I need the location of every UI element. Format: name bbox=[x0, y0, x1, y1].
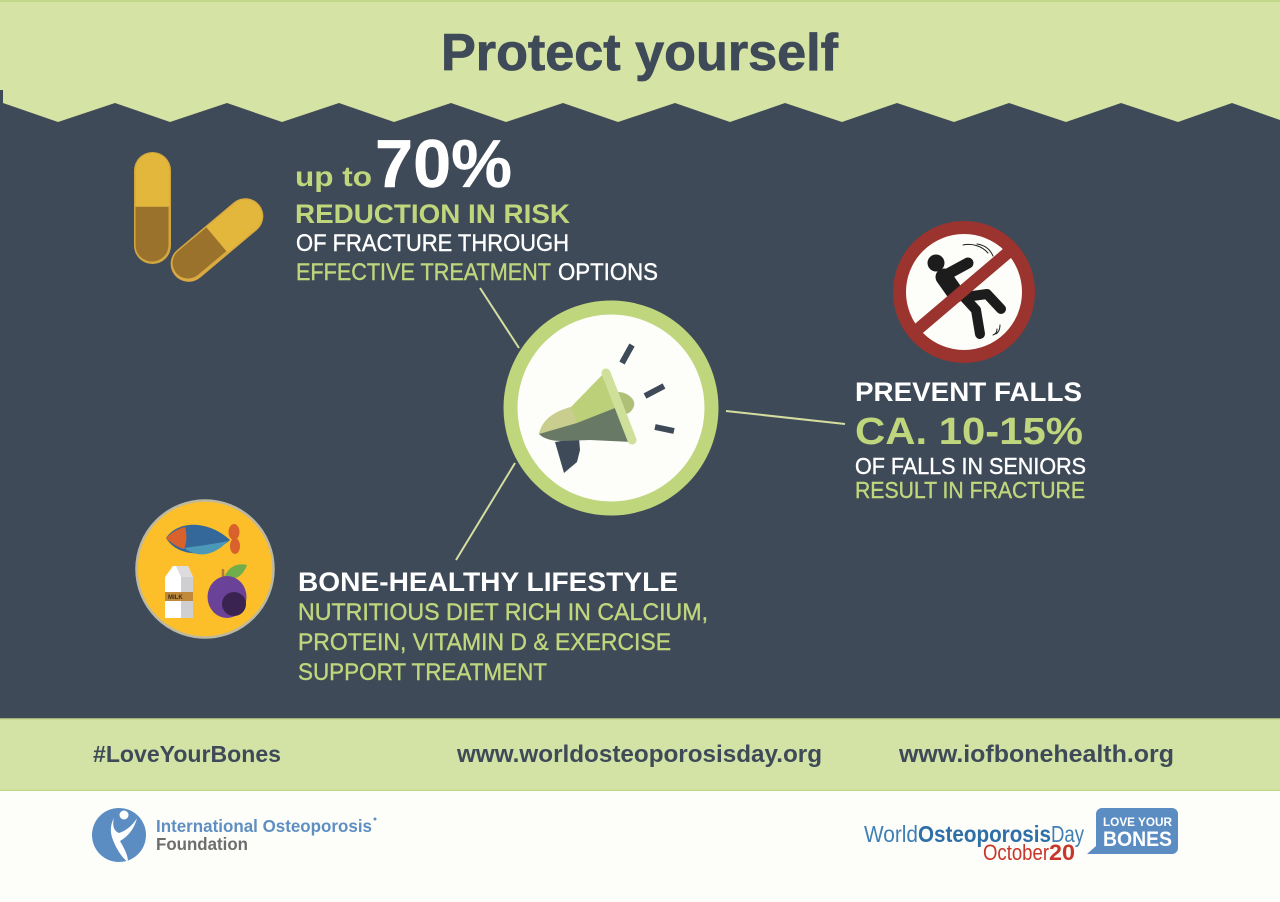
logo: world osteoporosis day bbox=[864, 821, 1084, 865]
logo name line one: International Osteoporosis bbox=[156, 816, 372, 836]
logo emblem bbox=[92, 808, 146, 862]
heading: BONE-HEALTHY LIFESTYLE bbox=[298, 567, 678, 597]
icon: diagonal capsule bbox=[163, 191, 271, 289]
logo name line two: Foundation bbox=[156, 834, 248, 854]
website: iof bone health: www.iofbonehealth.org bbox=[898, 741, 1174, 768]
icon: vertical capsule bbox=[134, 152, 171, 264]
falls in seniors line: OF FALLS IN SENIORS bbox=[855, 453, 1086, 479]
icon: megaphone bbox=[539, 373, 634, 473]
plum bbox=[208, 564, 247, 618]
website: world osteoporosis day: www.worldosteoporosisday.org bbox=[456, 741, 822, 768]
percentage figure: CA. 10-15% bbox=[855, 411, 1083, 453]
date: 20 bbox=[1049, 840, 1075, 865]
speech bubble: love your bones: LOVE YOUR bbox=[1103, 817, 1173, 829]
speech bubble: love your bones bbox=[1087, 808, 1178, 854]
osteoporosis word: Osteoporosis bbox=[918, 821, 1051, 847]
milk carton: MILK bbox=[168, 595, 183, 601]
header banner with zigzag edge bbox=[0, 0, 1280, 122]
icon: no falling sign bbox=[900, 228, 1028, 356]
hashtag: #LoveYourBones bbox=[93, 741, 281, 767]
line three: SUPPORT TREATMENT bbox=[298, 659, 547, 686]
connector lines from hub bbox=[456, 288, 845, 560]
central hub circle bbox=[510, 308, 712, 508]
line one: NUTRITIOUS DIET RICH IN CALCIUM, bbox=[298, 599, 708, 626]
text block: prevent falls bbox=[855, 377, 1086, 503]
speech bubble: love your bones: BONES bbox=[1103, 828, 1172, 851]
header top edge bbox=[0, 0, 1280, 2]
icon: sound dashes bbox=[622, 345, 674, 431]
title: Protect yourself bbox=[441, 24, 839, 82]
day word: Day bbox=[1051, 821, 1084, 847]
"up to" label: up to bbox=[295, 161, 372, 192]
line two: PROTEIN, VITAMIN D & EXERCISE bbox=[298, 629, 671, 656]
options word: OPTIONS bbox=[558, 259, 658, 286]
text block: treatment statistic bbox=[295, 126, 658, 286]
result in fracture line: RESULT IN FRACTURE bbox=[855, 477, 1085, 503]
prohibition slash bbox=[917, 250, 1011, 330]
world word: World bbox=[864, 821, 918, 847]
effective treatment line: EFFECTIVE TREATMENT bbox=[296, 259, 551, 286]
falling figure bbox=[928, 244, 1001, 335]
icon: healthy food circle bbox=[136, 500, 274, 638]
fish bbox=[166, 524, 240, 554]
fracture line: OF FRACTURE THROUGH bbox=[296, 230, 569, 257]
page background: main dark panel bbox=[0, 88, 1280, 720]
70% figure: 70% bbox=[375, 126, 512, 202]
october word: October bbox=[983, 840, 1049, 865]
logo: international osteoporosis foundation bbox=[92, 808, 376, 862]
footer band bbox=[0, 719, 1280, 790]
registered dot bbox=[374, 818, 376, 820]
white bottom strip bbox=[0, 791, 1280, 902]
reduction heading: REDUCTION IN RISK bbox=[295, 199, 571, 229]
text block: bone-healthy lifestyle bbox=[298, 567, 708, 686]
icon: capsules bbox=[134, 152, 271, 289]
heading: PREVENT FALLS bbox=[855, 377, 1082, 407]
